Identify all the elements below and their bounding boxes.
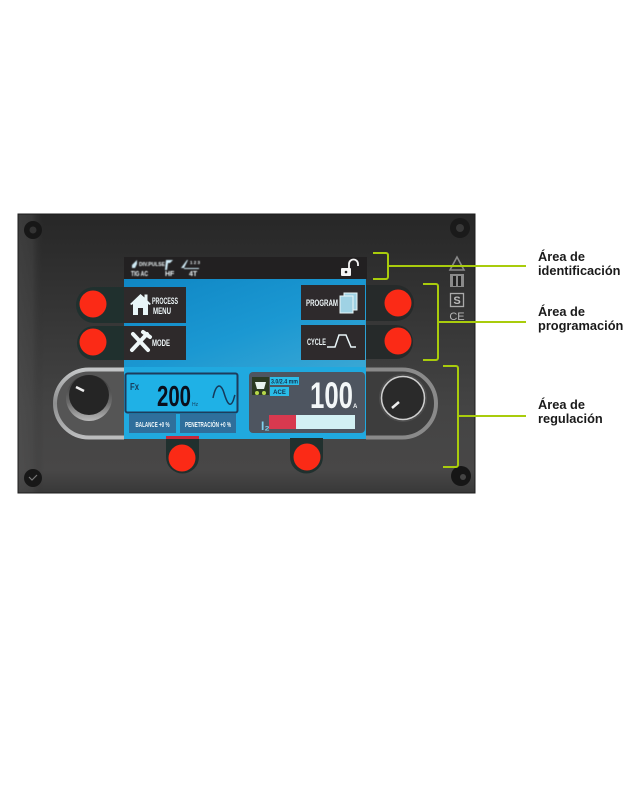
screen blue background <box>124 279 366 368</box>
label: regulation area: regulación <box>538 411 603 426</box>
button: mode: MODE <box>152 338 170 348</box>
label: identification area: Área de <box>538 249 585 264</box>
screw: bottom left <box>24 469 42 487</box>
current bar <box>269 415 355 429</box>
frequency display: 200 <box>157 381 191 413</box>
icon: torch modes <box>131 260 201 278</box>
control panel <box>18 214 475 493</box>
bracket: programming <box>423 284 526 360</box>
bracket: regulation <box>443 366 526 467</box>
label: identification area: identificación <box>538 263 621 278</box>
label: programming area: Área de <box>538 304 585 319</box>
frequency display <box>126 374 238 413</box>
left knob <box>66 375 112 421</box>
button: program: PROGRAM <box>306 298 338 308</box>
label: programming area: programación <box>538 318 624 333</box>
header bar <box>124 257 367 279</box>
right knob <box>379 374 427 422</box>
button: process menu <box>76 287 186 323</box>
penetration button <box>180 414 236 433</box>
screw: bottom right <box>451 466 471 486</box>
icon: house <box>130 294 151 315</box>
icon: torch modes: HF <box>165 271 175 278</box>
frequency display: Hz <box>192 402 199 408</box>
icon: torch modes: 4T <box>189 271 198 278</box>
touch screen <box>55 257 436 474</box>
icon: S mark: S <box>453 295 461 307</box>
current display <box>249 372 365 433</box>
button: cycle: CYCLE <box>307 337 326 347</box>
balance button <box>129 414 176 433</box>
button: program <box>301 285 414 321</box>
icon: torch modes: TIG AC <box>131 271 148 278</box>
current display: 3.0/2.4 mm <box>271 380 298 386</box>
icon: warning triangle <box>450 257 464 270</box>
regulation band <box>55 367 436 439</box>
icon: documents <box>340 293 357 313</box>
current display: I₂ <box>261 419 270 433</box>
button: mode <box>77 326 186 360</box>
icon: electrode <box>252 377 269 395</box>
bottom button left <box>166 436 199 474</box>
icon: manual book <box>450 274 464 287</box>
icon: open padlock <box>341 260 358 276</box>
button: process menu: PROCESS <box>152 296 178 306</box>
icon: cycle curve <box>327 335 356 347</box>
button: process menu: MENU <box>153 306 171 316</box>
label: regulation area: Área de <box>538 397 585 412</box>
button: cycle <box>301 325 413 360</box>
screw: top left <box>24 221 42 239</box>
screw: top right <box>450 218 470 238</box>
bottom button right <box>290 438 323 474</box>
icon: tools <box>132 332 150 350</box>
current display: 100 <box>310 375 353 416</box>
balance button: BALANCE +0 % <box>136 422 170 429</box>
icon: torch modes: 1 2 3 <box>190 260 201 265</box>
penetration button: PENETRACIÓN +0 % <box>185 420 232 429</box>
icon: sine wave <box>213 386 235 404</box>
current display: ACE <box>273 390 286 396</box>
icon: torch modes: DIV.PULSE <box>139 262 166 268</box>
bracket: identification <box>373 253 526 279</box>
icon: CE mark: CE <box>449 311 465 323</box>
icon: S mark <box>450 294 464 307</box>
current display: A <box>353 404 358 410</box>
frequency display: Fx <box>130 382 139 393</box>
